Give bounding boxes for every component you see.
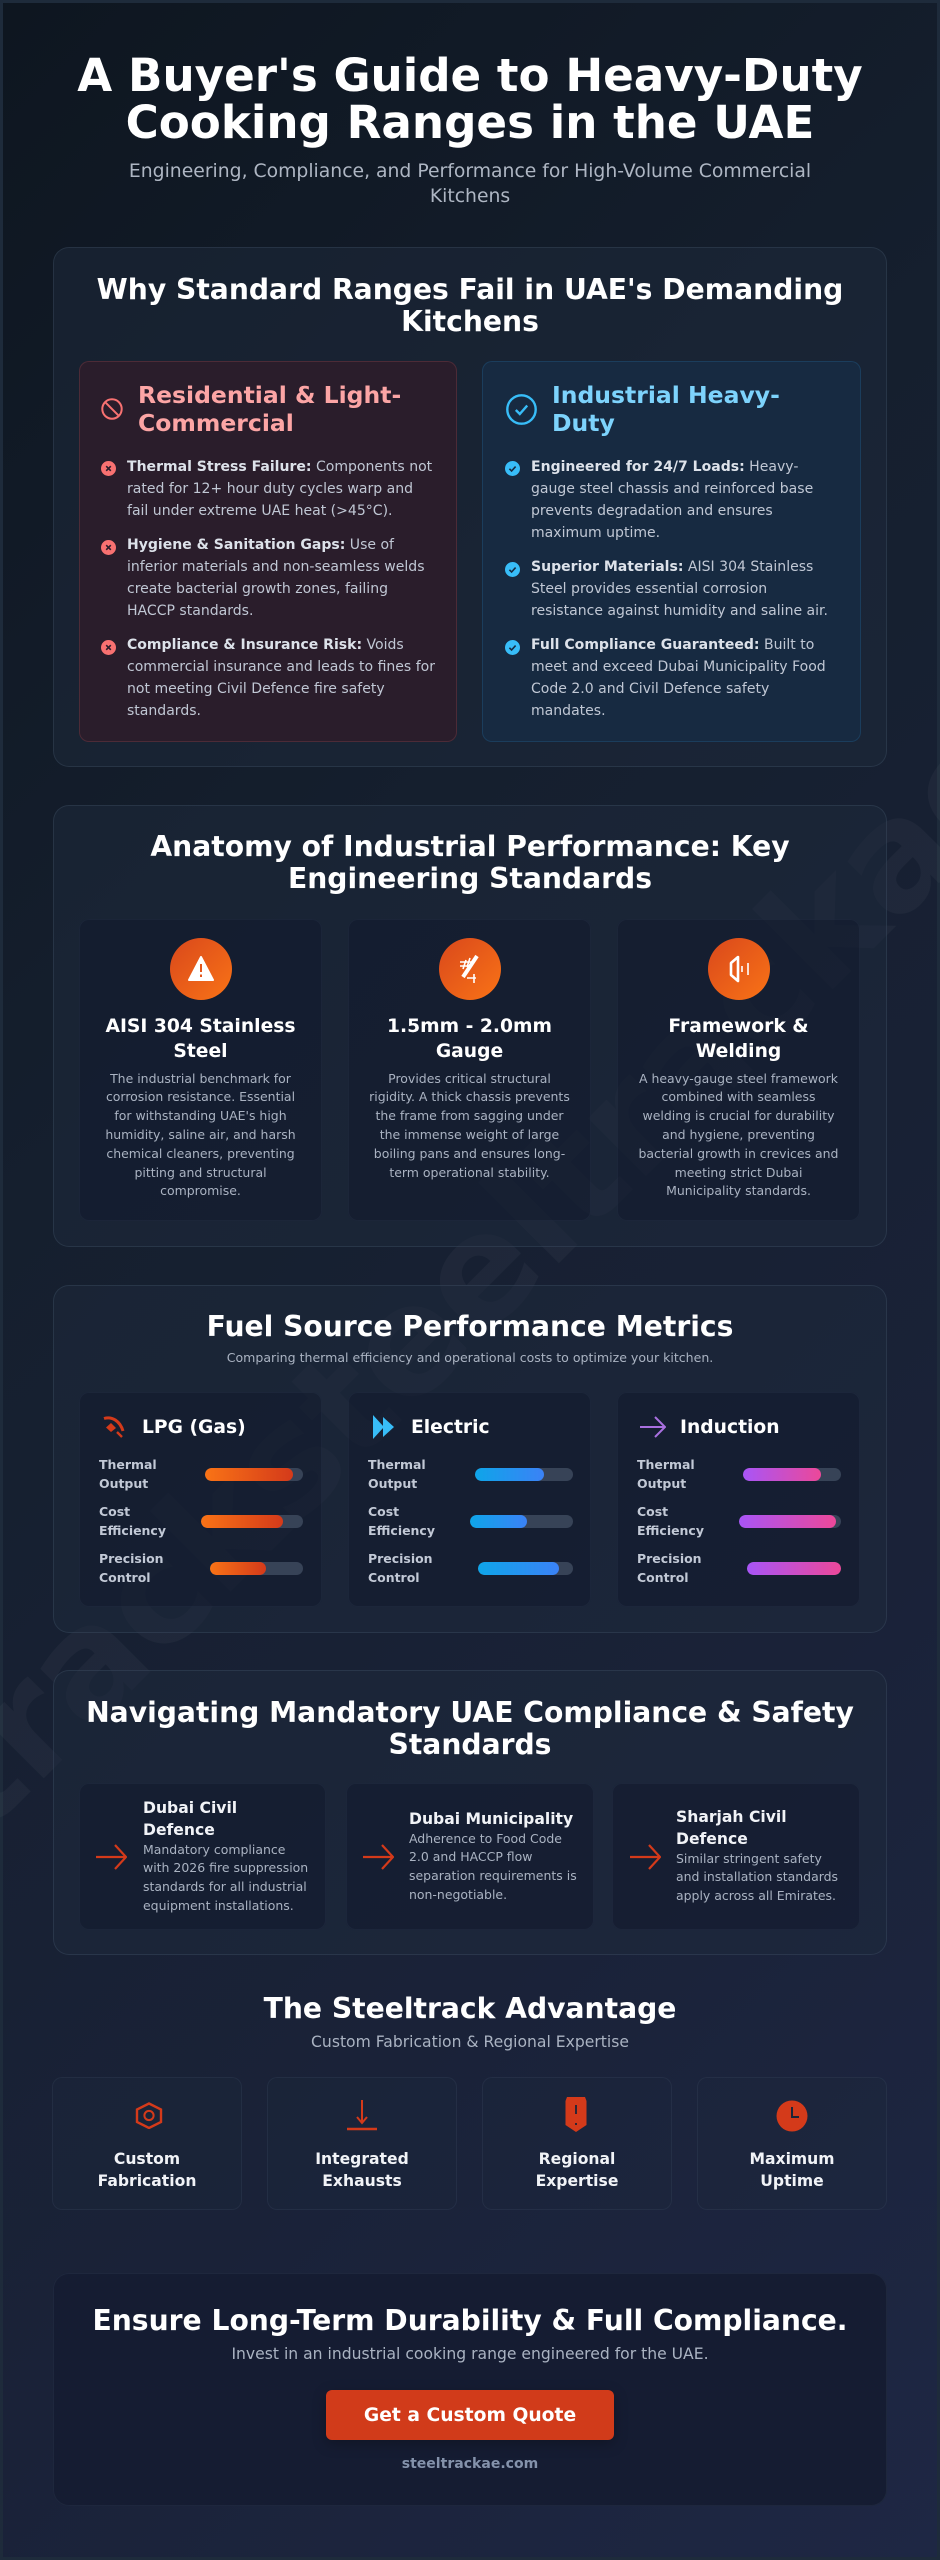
icon: cross bbox=[101, 461, 116, 476]
card description: welding is crucial for durability bbox=[643, 1108, 834, 1123]
text: superior materials: Superior Materials: AISI 304 Stainless bbox=[531, 559, 813, 575]
card title bbox=[668, 1016, 809, 1062]
card: integrated exhausts bbox=[267, 2077, 457, 2210]
card: framework bbox=[617, 919, 860, 1221]
card title: LPG (Gas) bbox=[142, 1416, 246, 1438]
card: gauge bbox=[348, 919, 591, 1221]
card title: Custom bbox=[114, 2150, 180, 2168]
icon: check bbox=[505, 640, 520, 655]
row: thermal output bbox=[368, 1456, 573, 1490]
card title bbox=[52, 2148, 242, 2192]
heading: the steeltrack advantage: The Steeltrack Advantage bbox=[264, 1992, 676, 2025]
card description: Mandatory compliance bbox=[143, 1842, 285, 1857]
icon: arrow bbox=[630, 1844, 661, 1870]
bar 85% bbox=[478, 1562, 573, 1574]
heading: industrial: Duty bbox=[552, 409, 615, 437]
card title bbox=[105, 1016, 296, 1062]
label: Efficiency bbox=[637, 1522, 704, 1538]
icon: prohibited bbox=[101, 398, 123, 420]
text: engineered for 24/7: Engineered for 24/7 Loads: Heavy- bbox=[531, 459, 798, 475]
heading: why standard ranges fail: Why Standard Ranges Fail in UAE's Demanding bbox=[97, 272, 843, 306]
subtitle bbox=[129, 161, 811, 207]
card description: A heavy-gauge steel framework bbox=[639, 1071, 838, 1086]
heading: why standard ranges fail: Kitchens bbox=[401, 304, 539, 338]
icon: arrow bbox=[96, 1844, 127, 1870]
text: thermal stress failure: Thermal Stress Failure: Components not bbox=[127, 459, 432, 475]
card title: Electric bbox=[411, 1416, 490, 1438]
card description bbox=[105, 1071, 296, 1198]
row: precision control bbox=[617, 1393, 860, 1587]
title: A Buyer's Guide to Heavy-Duty bbox=[77, 49, 863, 102]
label bbox=[368, 1456, 426, 1490]
row: cost efficiency bbox=[368, 1504, 573, 1538]
card title: Regional bbox=[539, 2150, 615, 2168]
text: superior materials bbox=[531, 559, 828, 619]
text: engineered for 24/7 bbox=[531, 459, 813, 541]
card title: Uptime bbox=[760, 2172, 824, 2190]
text: hygiene gaps: inferior materials and non-seamless welds bbox=[127, 559, 425, 575]
card title bbox=[387, 1016, 552, 1062]
text: thermal stress failure: fail under extreme UAE heat (>45°C). bbox=[127, 503, 393, 519]
label: Precision bbox=[368, 1550, 433, 1566]
card description: Provides critical structural bbox=[388, 1071, 551, 1086]
label bbox=[637, 1502, 704, 1540]
label: Control bbox=[368, 1570, 420, 1584]
text: call to action: Invest in an industrial cooking range engineered for the UAE. bbox=[231, 2345, 709, 2363]
text: full compliance: Full Compliance Guaranteed: Built to bbox=[531, 637, 814, 653]
heading: residential: Commercial bbox=[138, 409, 294, 437]
card: regional expertise bbox=[482, 2077, 672, 2210]
card description: corrosion resistance. Essential bbox=[106, 1089, 295, 1104]
label: Cost bbox=[637, 1504, 668, 1518]
card title: Induction bbox=[680, 1416, 780, 1438]
card: LPG bbox=[79, 1392, 322, 1607]
icon: speaker frame bbox=[708, 938, 770, 1000]
heading: compliance: Standards bbox=[389, 1728, 551, 1760]
card description: 2.0 and HACCP flow bbox=[409, 1849, 532, 1864]
bar 80% bbox=[201, 1515, 303, 1528]
label: Control bbox=[637, 1570, 689, 1584]
card description bbox=[409, 1830, 577, 1905]
heading: anatomy bbox=[150, 830, 790, 895]
card title: Gauge bbox=[436, 1040, 503, 1062]
card title: Welding bbox=[696, 1040, 781, 1062]
panel: call to action bbox=[53, 2273, 887, 2506]
button: get a custom quote: Get a Custom Quote bbox=[364, 2405, 576, 2426]
card: Dubai Civil Defence bbox=[79, 1783, 326, 1930]
label: Efficiency bbox=[368, 1522, 435, 1538]
card title bbox=[143, 1797, 237, 1841]
heading: compliance: Navigating Mandatory UAE Compliance & Safety bbox=[86, 1696, 854, 1728]
text: compliance risk: standards. bbox=[127, 703, 201, 719]
icon: hex nut bbox=[135, 2102, 163, 2129]
icon: check bbox=[505, 461, 520, 476]
card title: Defence bbox=[676, 1830, 748, 1848]
text: hygiene gaps: create bacterial growth zones, failing bbox=[127, 581, 388, 597]
panel: anatomy of industrial performance bbox=[53, 805, 887, 1247]
card title: Dubai Civil bbox=[143, 1799, 237, 1817]
card description: rigidity. A thick chassis prevents bbox=[369, 1089, 570, 1104]
panel: industrial heavy-duty bbox=[482, 361, 861, 742]
text: hygiene gaps bbox=[127, 537, 425, 619]
label: Precision bbox=[99, 1550, 164, 1566]
text: thermal stress failure: rated for 12+ hour duty cycles warp and bbox=[127, 481, 413, 497]
card description: the immense weight of large bbox=[380, 1127, 559, 1142]
card title: AISI 304 Stainless bbox=[105, 1016, 296, 1036]
text: thermal stress failure bbox=[127, 459, 432, 519]
label: Output bbox=[99, 1476, 148, 1490]
card title: 1.5mm - 2.0mm bbox=[387, 1016, 552, 1036]
card description: term operational stability. bbox=[389, 1165, 550, 1180]
card description: non-negotiable. bbox=[409, 1887, 507, 1902]
subheading: advantage: Custom Fabrication & Regional Expertise bbox=[311, 2033, 629, 2051]
heading: call to action: Ensure Long-Term Durability & Full Compliance. bbox=[92, 2304, 848, 2337]
subheading: fuel source: Comparing thermal efficiency and operational costs to optimize your kitchen. bbox=[227, 1350, 713, 1364]
card description: bacterial growth in crevices and bbox=[638, 1146, 838, 1161]
text: engineered for 24/7: prevents degradation and ensures bbox=[531, 503, 773, 519]
bar 70% bbox=[475, 1468, 573, 1480]
heading: anatomy: Anatomy of Industrial Performance: Key bbox=[150, 830, 790, 863]
panel: fuel source performance metrics bbox=[53, 1285, 887, 1633]
text: hygiene gaps: Hygiene & Sanitation Gaps: Use of bbox=[127, 537, 394, 553]
text: compliance risk: Compliance & Insurance Risk: Voids bbox=[127, 637, 404, 653]
bar 80% bbox=[743, 1468, 841, 1480]
button: get a custom quote bbox=[326, 2390, 614, 2440]
card description: separation requirements is bbox=[409, 1868, 577, 1883]
bar 90% bbox=[205, 1468, 303, 1480]
subtitle: Engineering, Compliance, and Performance for High-Volume Commercial bbox=[129, 161, 811, 182]
card description: boiling pans and ensures long- bbox=[374, 1146, 565, 1161]
label bbox=[368, 1550, 433, 1584]
card description: The industrial benchmark for bbox=[110, 1071, 291, 1086]
card description: combined with seamless bbox=[662, 1089, 815, 1104]
icon: fast forward bbox=[373, 1415, 394, 1439]
website: steeltrackae.com bbox=[402, 2456, 538, 2472]
text: full compliance: mandates. bbox=[531, 703, 606, 719]
row: precision control bbox=[368, 1550, 573, 1584]
card description: Similar stringent safety bbox=[676, 1851, 822, 1866]
card: Dubai Municipality bbox=[346, 1783, 594, 1930]
heading: fuel source: Fuel Source Performance Metrics bbox=[207, 1310, 733, 1343]
card description bbox=[143, 1841, 308, 1916]
card: custom fabrication bbox=[52, 2077, 242, 2210]
text: compliance risk: commercial insurance and leads to fines for bbox=[127, 659, 435, 675]
text: compliance risk bbox=[127, 637, 435, 719]
card description: pitting and structural bbox=[134, 1165, 267, 1180]
icon: clock bbox=[776, 2100, 808, 2132]
card description bbox=[638, 1071, 838, 1198]
card title bbox=[697, 2148, 887, 2192]
label: Output bbox=[368, 1476, 417, 1490]
heading: compliance bbox=[53, 1696, 887, 1760]
label bbox=[99, 1550, 164, 1584]
icon: cross bbox=[101, 540, 116, 555]
card title: Steel bbox=[173, 1040, 228, 1062]
card description: humidity, saline air, and harsh bbox=[105, 1127, 296, 1142]
panel: why standard ranges fail bbox=[53, 247, 887, 767]
label: Thermal bbox=[637, 1456, 695, 1472]
bar 55% bbox=[470, 1515, 573, 1528]
card description: for withstanding UAE's high bbox=[114, 1108, 287, 1123]
card description: Adherence to Food Code bbox=[409, 1831, 562, 1846]
icon: download arrow bbox=[346, 2099, 378, 2131]
card: AISI 304 bbox=[79, 919, 322, 1221]
heading: industrial bbox=[552, 381, 780, 437]
text: superior materials: resistance against humidity and saline air. bbox=[531, 603, 828, 619]
card title: Defence bbox=[143, 1821, 215, 1839]
text: full compliance: meet and exceed Dubai Municipality Food bbox=[531, 659, 826, 675]
card description bbox=[369, 1071, 570, 1180]
label: Precision bbox=[637, 1550, 702, 1566]
card title: Maximum bbox=[749, 2150, 835, 2168]
panel: residential and light-commercial bbox=[79, 361, 457, 742]
card title: Integrated bbox=[315, 2150, 409, 2168]
card title: Fabrication bbox=[98, 2172, 196, 2190]
row: thermal output bbox=[617, 1393, 860, 1493]
card description bbox=[676, 1850, 838, 1906]
card description: apply across all Emirates. bbox=[676, 1888, 836, 1903]
icon: cross bbox=[101, 640, 116, 655]
icon: warning bbox=[170, 938, 232, 1000]
panel: mandatory compliance bbox=[53, 1670, 887, 1955]
card title bbox=[676, 1806, 787, 1850]
row: thermal output bbox=[99, 1456, 303, 1490]
label bbox=[99, 1456, 157, 1490]
text: full compliance: Code 2.0 and Civil Defence safety bbox=[531, 681, 769, 697]
heading: residential bbox=[138, 381, 401, 437]
card title: Sharjah Civil bbox=[676, 1808, 787, 1826]
card description: with 2026 fire suppression bbox=[143, 1860, 308, 1875]
card description: the frame from sagging under bbox=[375, 1108, 564, 1123]
card description: chemical cleaners, preventing bbox=[106, 1146, 295, 1161]
subtitle: Kitchens bbox=[430, 186, 510, 207]
label bbox=[368, 1504, 435, 1538]
text: engineered for 24/7: maximum uptime. bbox=[531, 525, 660, 541]
card: maximum uptime bbox=[697, 2077, 887, 2210]
card title: Dubai Municipality bbox=[409, 1810, 573, 1828]
card description: equipment installations. bbox=[143, 1898, 294, 1913]
label bbox=[637, 1548, 702, 1586]
text: full compliance bbox=[531, 637, 826, 719]
card description: standards for all industrial bbox=[143, 1879, 307, 1894]
card title bbox=[267, 2148, 457, 2192]
label: Cost bbox=[368, 1504, 399, 1518]
icon: check circle bbox=[506, 394, 537, 425]
label: Control bbox=[99, 1570, 151, 1584]
title: Cooking Ranges in the UAE bbox=[126, 96, 814, 148]
icon: check bbox=[505, 562, 520, 577]
heading: anatomy: Engineering Standards bbox=[288, 862, 652, 895]
bar 95% bbox=[739, 1515, 841, 1528]
card description: Municipality standards. bbox=[666, 1183, 811, 1198]
label: Output bbox=[637, 1476, 686, 1490]
card description: meeting strict Dubai bbox=[675, 1165, 802, 1180]
heading: why standard ranges fail bbox=[97, 272, 843, 338]
heading: residential: Residential & Light- bbox=[138, 381, 401, 409]
card title: Framework & bbox=[668, 1016, 809, 1036]
card: induction bbox=[617, 1392, 860, 1607]
heading: industrial: Industrial Heavy- bbox=[552, 381, 780, 409]
label: Thermal bbox=[99, 1456, 157, 1472]
card title: Expertise bbox=[536, 2172, 618, 2190]
card description: and hygiene, preventing bbox=[662, 1127, 815, 1142]
card: Sharjah Civil Defence bbox=[612, 1783, 860, 1930]
card title bbox=[482, 2148, 672, 2192]
icon: gauge tool bbox=[438, 938, 500, 1000]
label: Efficiency bbox=[99, 1522, 166, 1538]
title bbox=[77, 49, 863, 148]
row: cost efficiency bbox=[617, 1393, 860, 1540]
card description: and installation standards bbox=[676, 1869, 838, 1884]
text: superior materials: Steel provides essential corrosion bbox=[531, 581, 767, 597]
label bbox=[99, 1504, 166, 1538]
icon: gas bbox=[104, 1416, 124, 1438]
label bbox=[637, 1454, 695, 1492]
bar 60% bbox=[210, 1562, 303, 1574]
card description: compromise. bbox=[160, 1183, 241, 1198]
text: engineered for 24/7: gauge steel chassis and reinforced base bbox=[531, 481, 813, 497]
card: electric bbox=[348, 1392, 591, 1607]
row: cost efficiency bbox=[99, 1504, 303, 1538]
icon: shield bbox=[565, 2096, 587, 2133]
text: hygiene gaps: HACCP standards. bbox=[127, 603, 253, 619]
text: compliance risk: not meeting Civil Defence fire safety bbox=[127, 681, 385, 697]
label: Thermal bbox=[368, 1456, 426, 1472]
icon: arrow bbox=[363, 1844, 394, 1870]
card title: Exhausts bbox=[322, 2172, 402, 2190]
row: precision control bbox=[99, 1550, 303, 1584]
label: Cost bbox=[99, 1504, 130, 1518]
bar 100% bbox=[747, 1562, 841, 1574]
icon: arrow bbox=[640, 1416, 666, 1438]
